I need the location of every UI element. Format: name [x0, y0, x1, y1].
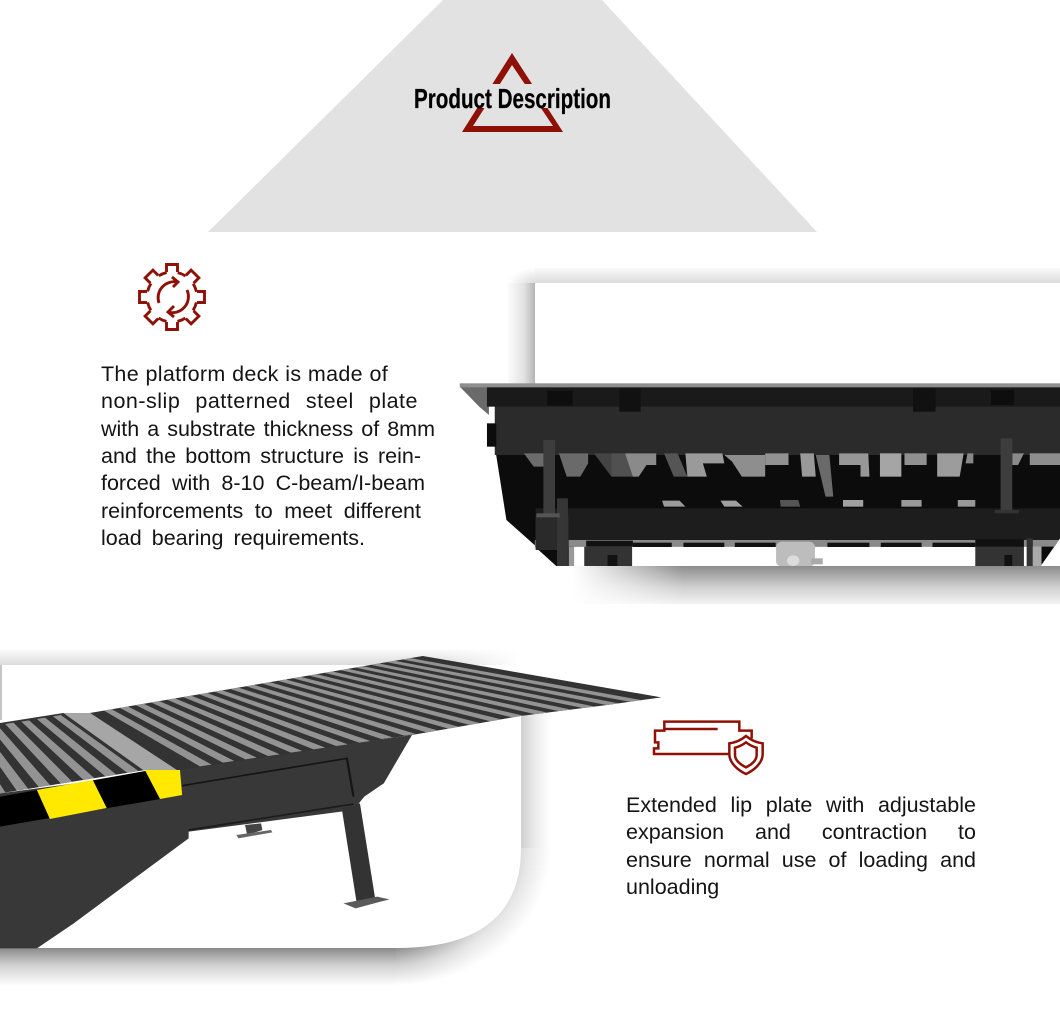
- icon: lip plate with shield: [654, 722, 763, 774]
- text block: extended lip plate description: unloading: [626, 875, 719, 899]
- illustration: dock leveler front view: [460, 383, 1060, 567]
- text block: platform deck description: and the bottom structure is rein-: [101, 444, 421, 468]
- text block: extended lip plate description: expansion and contraction to: [626, 820, 976, 844]
- text block: platform deck description: load bearing requirements.: [101, 526, 365, 550]
- deck: [0, 653, 668, 797]
- title: Product Description with triangle: [414, 53, 611, 132]
- header background trapezoid: [208, 0, 817, 232]
- icon: gear with rotating arrows: [140, 264, 204, 330]
- machine body: [0, 735, 412, 948]
- text block: platform deck description: forced with 8-10 C-beam/I-beam: [101, 471, 425, 495]
- hazard stripe: [0, 771, 160, 827]
- text block: platform deck description: non-slip patterned steel plate: [101, 389, 418, 413]
- text block: extended lip plate description: [626, 793, 976, 899]
- panel: bottom card with shadow: [0, 650, 566, 998]
- text block: platform deck description: The platform deck is made of: [101, 362, 388, 386]
- icon: red triangle: [462, 53, 563, 132]
- text block: extended lip plate description: Extended lip plate with adjustable: [626, 793, 976, 817]
- text block: platform deck description: reinforcements to meet different: [101, 499, 421, 523]
- title: Product Description with triangle: Product Description: [414, 83, 611, 114]
- illustration: dock leveler perspective view: [0, 653, 668, 948]
- support leg: [342, 803, 375, 902]
- panel: top card with shadow: [508, 268, 1060, 604]
- text block: extended lip plate description: ensure normal use of loading and: [626, 848, 976, 872]
- text block: platform deck description: [101, 362, 435, 550]
- text block: platform deck description: with a substrate thickness of 8mm: [101, 417, 435, 441]
